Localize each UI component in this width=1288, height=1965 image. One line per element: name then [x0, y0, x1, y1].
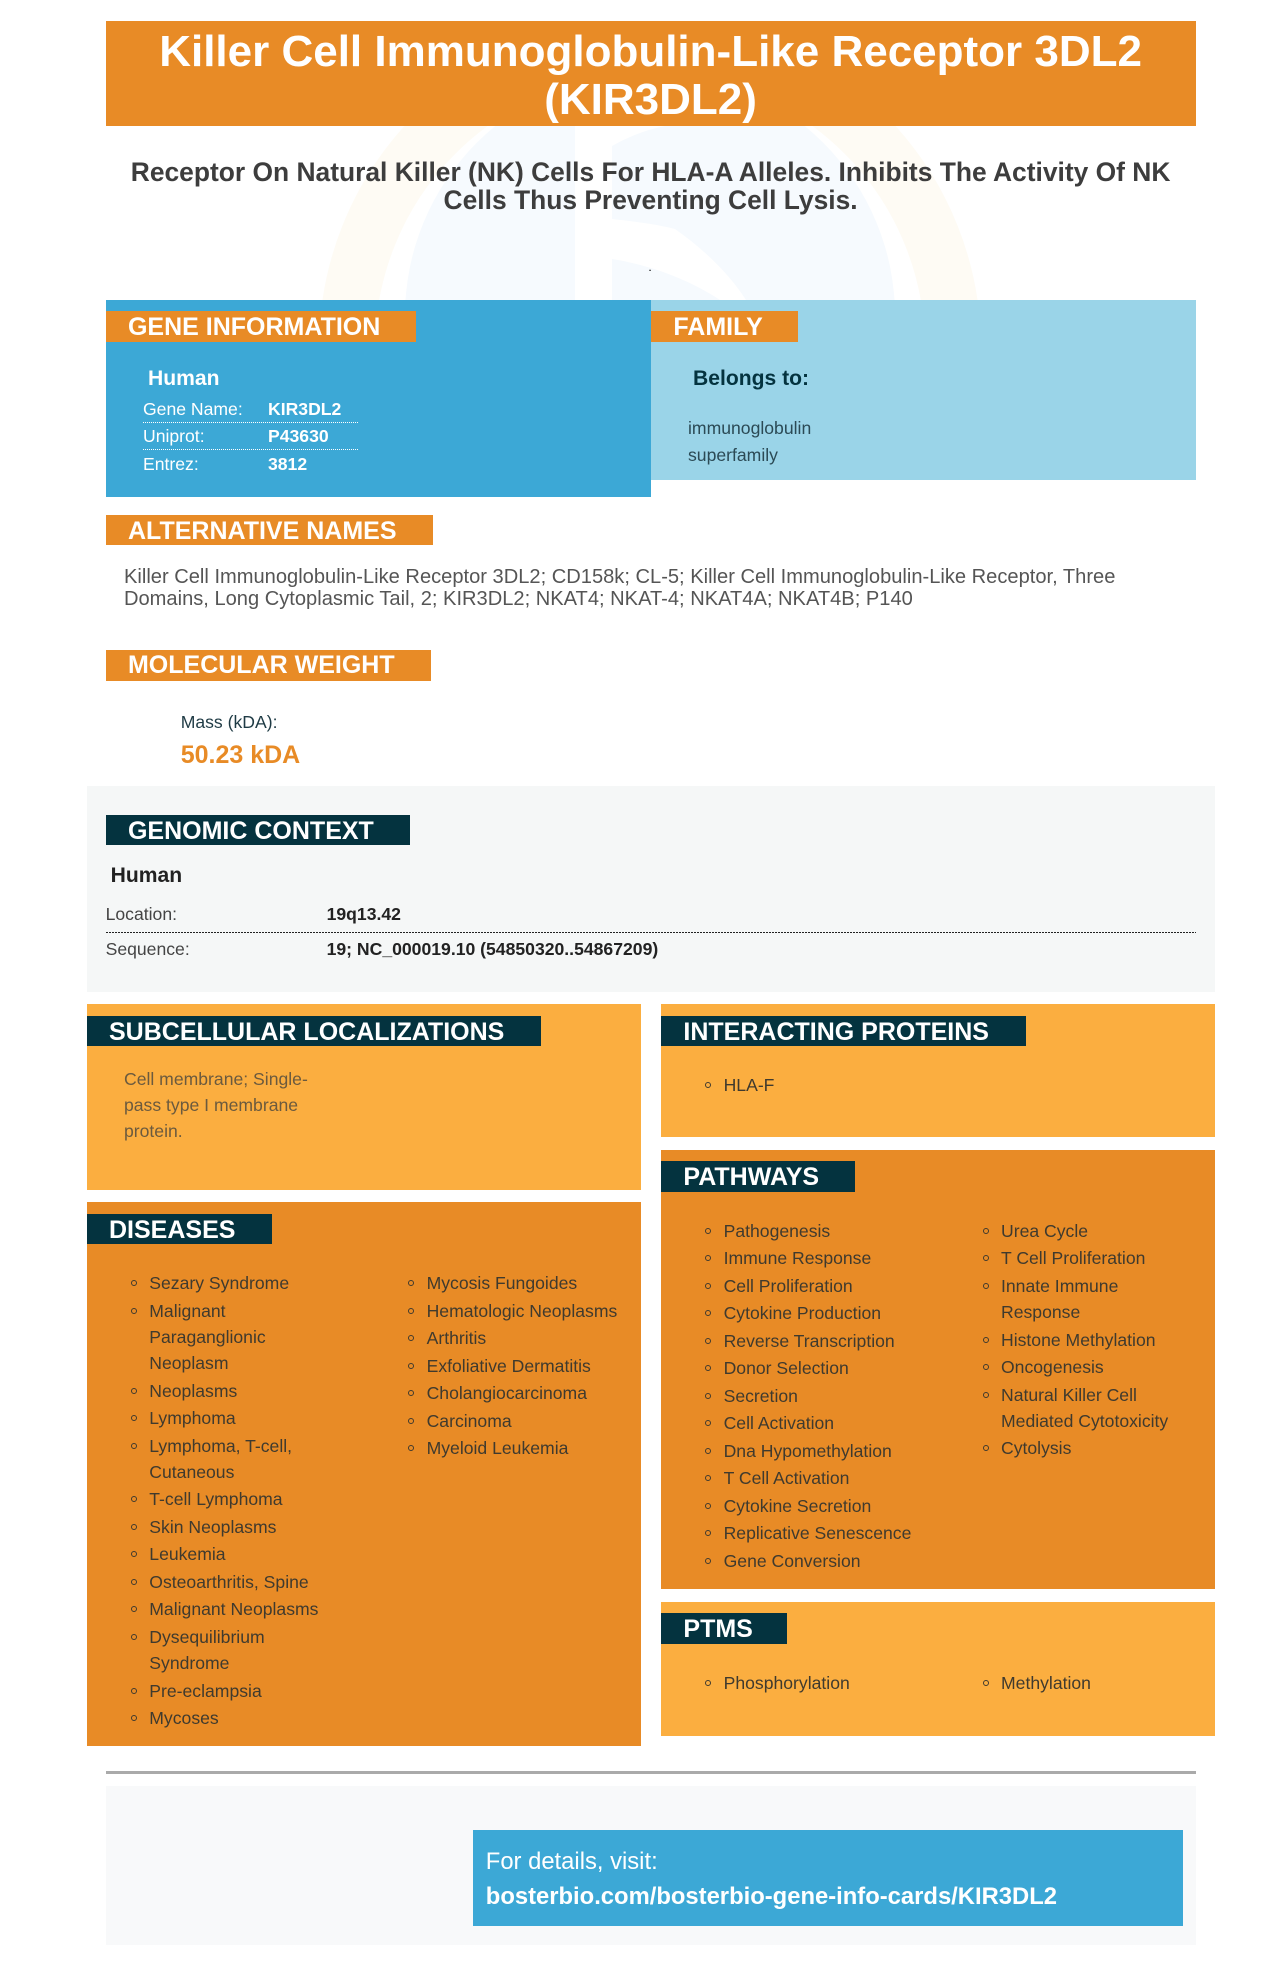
heading: genomic context: GENOMIC CONTEXT — [128, 817, 374, 845]
title: Killer Cell Immunoglobulin-Like Receptor 3DL2 — [159, 27, 1142, 76]
details label: For details, visit: — [486, 1848, 658, 1875]
disease list column 2: Myeloid Leukemia — [427, 1438, 568, 1458]
pathway list column 1: Reverse Transcription — [724, 1331, 895, 1351]
pathway list column 2: Mediated Cytotoxicity — [1001, 1411, 1168, 1431]
subtitle: Cells Thus Preventing Cell Lysis. — [444, 185, 858, 215]
pathway list column 1: Secretion — [724, 1386, 798, 1406]
row: sequence: 19; NC_000019.10 (54850320..54867209) — [327, 939, 658, 959]
disease list column 2: Carcinoma — [427, 1411, 512, 1431]
row: entrez: 3812 — [268, 454, 307, 474]
panel: subcellular localizations — [87, 1004, 641, 1190]
disease list column 1: Malignant Neoplasms — [149, 1599, 318, 1619]
row: gene name: Gene Name: — [143, 399, 243, 419]
panel: genomic context — [87, 786, 1215, 992]
disease list column 1: Mycoses — [149, 1708, 219, 1728]
row: uniprot — [143, 422, 358, 450]
disease list column 2: Hematologic Neoplasms — [427, 1301, 617, 1321]
disease list column 1: Lymphoma, T-cell, — [149, 1436, 292, 1456]
disease list column 1: Syndrome — [149, 1653, 229, 1673]
pathway list column 1: Cytokine Production — [724, 1303, 881, 1323]
disease list column 1: Skin Neoplasms — [149, 1517, 276, 1537]
subtitle — [131, 157, 1170, 215]
disease list column 1: Osteoarthritis, Spine — [149, 1572, 309, 1592]
pathway list column 2: Histone Methylation — [1001, 1330, 1156, 1350]
row: location: 19q13.42 — [327, 904, 401, 924]
alternative names text: Killer Cell Immunoglobulin-Like Receptor 3DL2; CD158k; CL-5; Killer Cell Immunoglobulin-Like Receptor, Three — [124, 566, 1115, 588]
disease list column 1: Cutaneous — [149, 1462, 234, 1482]
species label: Human — [111, 864, 182, 887]
heading: alternative names: ALTERNATIVE NAMES — [128, 517, 397, 545]
row: entrez — [143, 454, 307, 474]
row: gene name: KIR3DL2 — [268, 399, 341, 419]
pathway list column 1: Cell Proliferation — [724, 1276, 853, 1296]
heading: pathways: PATHWAYS — [683, 1163, 819, 1191]
row: sequence: Sequence: — [106, 939, 190, 959]
disease list column 1: Neoplasms — [149, 1381, 237, 1401]
dot mark: . — [648, 260, 652, 274]
family value: immunoglobulin — [688, 418, 811, 438]
details url: bosterbio.com/bosterbio-gene-info-cards/KIR3DL2 — [486, 1883, 1057, 1910]
disease list column 1: Dysequilibrium — [149, 1627, 265, 1647]
heading: ptms: PTMS — [683, 1615, 753, 1643]
pathway list column 2: Natural Killer Cell — [1001, 1385, 1137, 1405]
heading: diseases — [87, 1214, 272, 1244]
pathway list column 2: Innate Immune — [1001, 1276, 1118, 1296]
disease list column 1: Lymphoma — [149, 1408, 236, 1428]
panel: ptms — [661, 1602, 1214, 1736]
ptm list column 2: Methylation — [1001, 1673, 1091, 1693]
panel: interacting proteins — [661, 1004, 1214, 1137]
panel: family — [651, 300, 1196, 480]
disease list column 1: Pre-eclampsia — [149, 1681, 262, 1701]
heading: pathways — [661, 1161, 855, 1192]
panel: pathways — [661, 1150, 1214, 1589]
pathway list column 2: Response — [1001, 1302, 1080, 1322]
title — [106, 21, 1196, 126]
row: entrez: Entrez: — [143, 454, 199, 474]
panel: footer — [106, 1786, 1196, 1945]
pathway list column 1: Immune Response — [724, 1248, 871, 1268]
row: uniprot: P43630 — [268, 426, 329, 446]
heading: gene information: GENE INFORMATION — [128, 313, 380, 341]
localization text: protein. — [124, 1121, 183, 1141]
title: (KIR3DL2) — [544, 75, 757, 124]
panel: gene information — [106, 300, 651, 497]
disease list column 2: Cholangiocarcinoma — [427, 1383, 587, 1403]
mass value: 50.23 kDA — [181, 741, 300, 769]
disease list column 1 — [131, 1273, 318, 1728]
mass label: Mass (kDA): — [181, 712, 277, 732]
disease list column 2: Exfoliative Dermatitis — [427, 1356, 591, 1376]
row: location: Location: — [106, 904, 177, 924]
disease list column 1: Leukemia — [149, 1544, 226, 1564]
disease list column 1: Malignant — [149, 1301, 226, 1321]
pathway list column 2: T Cell Proliferation — [1001, 1248, 1145, 1268]
alternative names text: Domains, Long Cytoplasmic Tail, 2; KIR3DL2; NKAT4; NKAT-4; NKAT4A; NKAT4B; P140 — [124, 588, 913, 610]
pathway list column 2 — [983, 1221, 1168, 1458]
protein list: HLA-F — [724, 1075, 774, 1095]
heading: interacting proteins: INTERACTING PROTEINS — [683, 1018, 989, 1046]
pathway list column 1: Cytokine Secretion — [724, 1496, 871, 1516]
pathway list column 1: Dna Hypomethylation — [724, 1441, 892, 1461]
callout: details link — [473, 1830, 1183, 1926]
pathway list column 2: Oncogenesis — [1001, 1357, 1104, 1377]
heading: molecular weight: MOLECULAR WEIGHT — [128, 651, 395, 679]
disease list column 2: Mycosis Fungoides — [427, 1273, 577, 1293]
localization text: pass type I membrane — [124, 1095, 298, 1115]
row: location — [106, 900, 1196, 933]
pathway list column 1 — [705, 1221, 911, 1571]
disease list column 1: T-cell Lymphoma — [149, 1489, 283, 1509]
row: uniprot: Uniprot: — [143, 426, 205, 446]
heading: family — [651, 311, 798, 342]
disease list column 1: Paraganglionic — [149, 1327, 266, 1347]
localization text — [124, 1069, 308, 1141]
pathway list column 1: Pathogenesis — [724, 1221, 830, 1241]
disease list column 1: Neoplasm — [149, 1353, 228, 1373]
species label: Human — [148, 367, 219, 390]
pathway list column 1: Gene Conversion — [724, 1551, 861, 1571]
alternative names text — [124, 566, 1115, 610]
heading: family: FAMILY — [673, 313, 763, 341]
panel: diseases — [87, 1202, 641, 1746]
disease list column 2: Arthritis — [427, 1328, 486, 1348]
row: gene name — [143, 395, 358, 423]
family value — [688, 418, 811, 465]
pathway list column 2: Cytolysis — [1001, 1438, 1071, 1458]
pathway list column 1: Donor Selection — [724, 1358, 849, 1378]
pathway list column 1: Replicative Senescence — [724, 1523, 911, 1543]
belongs to label: Belongs to: — [693, 367, 809, 390]
ptm list column 1: Phosphorylation — [724, 1673, 850, 1693]
pathway list column 1: T Cell Activation — [724, 1468, 849, 1488]
watermark logo — [322, 126, 978, 300]
family value: superfamily — [688, 445, 778, 465]
disease list column 2 — [408, 1273, 617, 1458]
localization text: Cell membrane; Single- — [124, 1069, 308, 1089]
heading: diseases: DISEASES — [109, 1216, 235, 1244]
row: sequence — [106, 939, 658, 959]
pathway list column 2: Urea Cycle — [1001, 1221, 1088, 1241]
disease list column 1: Sezary Syndrome — [149, 1273, 289, 1293]
pathway list column 1: Cell Activation — [724, 1413, 834, 1433]
heading: subcellular localizations: SUBCELLULAR LOCALIZATIONS — [109, 1018, 504, 1046]
heading: ptms — [661, 1613, 787, 1644]
subtitle: Receptor On Natural Killer (NK) Cells For HLA-A Alleles. Inhibits The Activity Of NK — [131, 157, 1170, 187]
